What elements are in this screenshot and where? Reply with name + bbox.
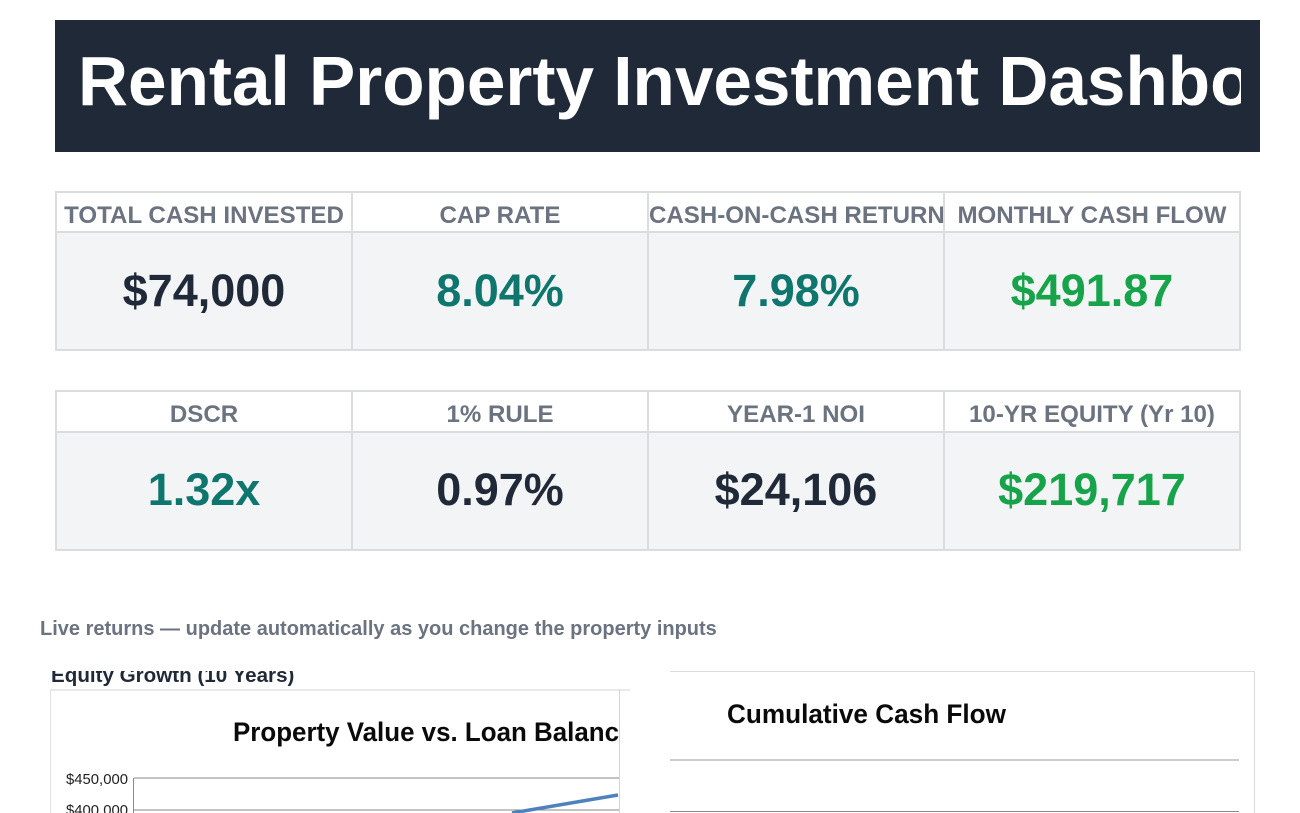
y axis labels — [66, 771, 128, 813]
KPI: DSCR: 1.32x — [148, 464, 260, 515]
KPI: cap rate: 8.04% — [436, 265, 564, 316]
chart title: Cumulative Cash Flow — [727, 699, 1007, 729]
KPI: DSCR — [55, 390, 351, 551]
KPI: year-1 NOI: $24,106 — [715, 464, 877, 515]
chart: property value vs loan balance — [50, 689, 630, 813]
KPI: cap rate: CAP RATE — [440, 202, 560, 229]
KPI row 2 — [55, 390, 1241, 551]
KPI: 10-year equity: $219,717 — [998, 464, 1186, 515]
KPI: cash-on-cash return: 7.98% — [732, 265, 860, 316]
KPI: total cash invested: TOTAL CASH INVESTED — [64, 202, 344, 229]
KPI: year-1 NOI: YEAR-1 NOI — [727, 401, 865, 428]
title banner — [55, 20, 1260, 152]
property value line — [512, 795, 618, 813]
KPI: 1% rule: 1% RULE — [446, 401, 554, 428]
subtitle note: Live returns — update automatically as you change the property inputs — [40, 618, 717, 640]
KPI: 10-year equity — [945, 390, 1241, 551]
KPI: monthly cash flow — [945, 191, 1241, 351]
KPI row 1 — [55, 191, 1241, 351]
KPI: cash-on-cash return: CASH-ON-CASH RETURN — [649, 202, 945, 229]
KPI: DSCR: DSCR — [170, 401, 238, 428]
KPI: 1% rule: 0.97% — [436, 464, 564, 515]
KPI: 10-year equity: 10-YR EQUITY (Yr 10) — [969, 401, 1215, 428]
y axis labels: $450,000 — [66, 771, 128, 788]
chart title: Property Value vs. Loan Balanc — [233, 717, 619, 747]
KPI: year-1 NOI — [649, 390, 943, 551]
KPI: total cash invested: $74,000 — [123, 265, 285, 316]
KPI: monthly cash flow: MONTHLY CASH FLOW — [957, 202, 1227, 229]
KPI: total cash invested — [55, 191, 351, 351]
KPI: 1% rule — [353, 390, 647, 551]
KPI: monthly cash flow: $491.87 — [1011, 265, 1173, 316]
KPI: cap rate — [353, 191, 647, 351]
KPI: cash-on-cash return — [649, 191, 945, 351]
